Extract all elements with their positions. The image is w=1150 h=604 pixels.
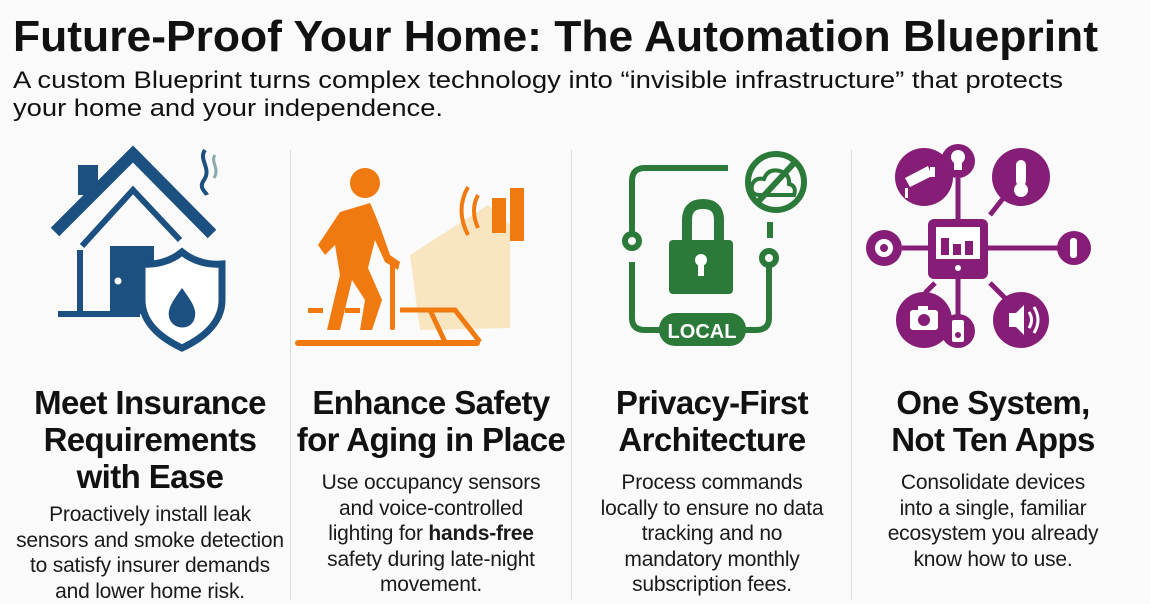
subtitle bbox=[13, 67, 1063, 122]
text: aging: safety during late-night bbox=[327, 548, 535, 570]
icon: house with shield bbox=[55, 150, 222, 348]
text: insurance: sensors and smoke detection bbox=[16, 528, 284, 552]
text: one system: know how to use. bbox=[913, 548, 1073, 570]
heading: one system: Not Ten Apps bbox=[891, 421, 1095, 458]
panel: privacy bbox=[601, 384, 824, 596]
text: insurance bbox=[16, 503, 284, 602]
heading: privacy: Architecture bbox=[618, 421, 806, 458]
text: privacy: subscription fees. bbox=[632, 573, 792, 596]
text: one system: ecosystem you already bbox=[888, 522, 1098, 545]
header bbox=[13, 12, 1098, 122]
text: aging: Use occupancy sensors bbox=[322, 471, 540, 494]
text: one system bbox=[888, 471, 1098, 570]
text: aging: movement. bbox=[380, 573, 482, 596]
subtitle: your home and your independence. bbox=[13, 95, 443, 122]
icon: aging person with light bbox=[295, 168, 524, 346]
text: privacy: Process commands bbox=[621, 471, 803, 494]
heading: aging: Enhance Safety bbox=[312, 384, 550, 421]
icon: privacy lock: LOCAL bbox=[668, 321, 736, 343]
text: aging bbox=[322, 471, 540, 596]
heading: aging: for Aging in Place bbox=[297, 421, 565, 458]
text: privacy: locally to ensure no data bbox=[601, 496, 823, 520]
text: insurance: to satisfy insurer demands bbox=[30, 554, 270, 577]
panel: insurance bbox=[16, 384, 284, 602]
heading: insurance: Meet Insurance bbox=[34, 384, 266, 421]
heading: privacy bbox=[616, 384, 808, 458]
text: privacy: tracking and no bbox=[642, 522, 782, 545]
heading: insurance: Requirements bbox=[44, 421, 256, 458]
heading: one system: One System, bbox=[896, 384, 1090, 421]
heading: insurance: with Ease bbox=[77, 458, 223, 495]
panel: one system bbox=[888, 384, 1098, 570]
text: one system: Consolidate devices bbox=[901, 471, 1085, 494]
text: insurance: and lower home risk. bbox=[55, 580, 245, 602]
heading: one system bbox=[891, 384, 1095, 458]
icon: hub with devices bbox=[866, 144, 1091, 348]
text: aging: and voice-controlled bbox=[339, 496, 523, 520]
subtitle: A custom Blueprint turns complex technology into “invisible infrastructure” that protects bbox=[13, 67, 1063, 94]
text: one system: into a single, familiar bbox=[900, 496, 1086, 520]
heading: privacy: Privacy-First bbox=[616, 384, 808, 421]
title: Future-Proof Your Home: The Automation Blueprint bbox=[13, 12, 1098, 61]
heading: insurance bbox=[34, 384, 266, 495]
icon: privacy lock bbox=[625, 154, 804, 346]
text: insurance: Proactively install leak bbox=[49, 503, 251, 526]
panel: aging in place bbox=[297, 384, 565, 596]
text: privacy bbox=[601, 471, 824, 596]
text: privacy: mandatory monthly bbox=[624, 548, 800, 570]
heading: aging bbox=[297, 384, 565, 458]
text: aging: lighting for hands-free bbox=[328, 522, 534, 545]
